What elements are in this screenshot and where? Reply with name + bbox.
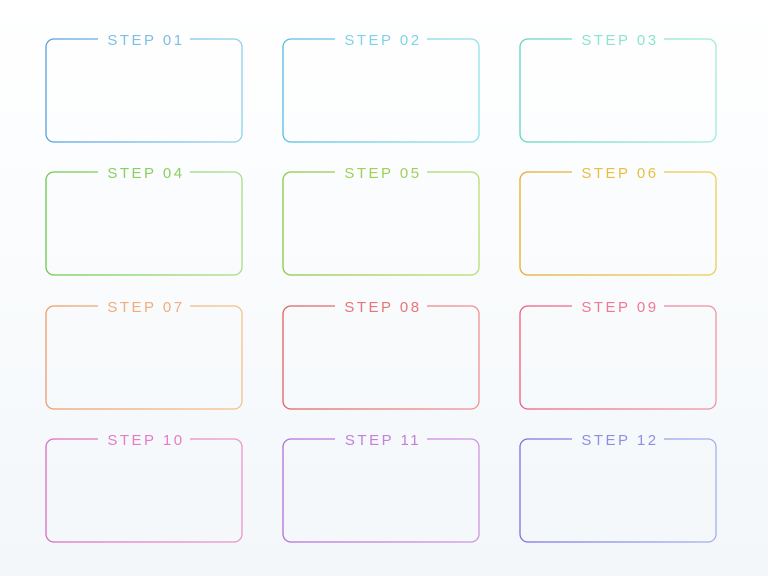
panel: step 10 bbox=[46, 432, 242, 542]
panel: step 02: STEP 02 bbox=[344, 32, 422, 49]
panel: step 12: STEP 12 bbox=[581, 432, 659, 449]
panel: step 02 bbox=[283, 32, 479, 142]
panel: step 09: STEP 09 bbox=[581, 299, 659, 316]
panel: step 07 bbox=[46, 299, 242, 409]
panel: step 04: STEP 04 bbox=[107, 165, 185, 182]
panel: step 01 bbox=[46, 32, 242, 142]
panel: step 08 bbox=[283, 299, 479, 409]
panel: step 12 bbox=[520, 432, 716, 542]
panel: step 05: STEP 05 bbox=[344, 165, 422, 182]
panel: step 03 bbox=[520, 32, 716, 142]
panel: step 07: STEP 07 bbox=[107, 299, 185, 316]
panel: step 01: STEP 01 bbox=[107, 32, 185, 49]
panel: step 08: STEP 08 bbox=[344, 299, 422, 316]
panel: step 03: STEP 03 bbox=[581, 32, 659, 49]
panel: step 09 bbox=[520, 299, 716, 409]
panel: step 11: STEP 11 bbox=[345, 432, 421, 449]
panel: step 11 bbox=[283, 432, 479, 542]
panel: step 05 bbox=[283, 165, 479, 275]
panel: step 06 bbox=[520, 165, 716, 275]
panel: step 06: STEP 06 bbox=[581, 165, 659, 182]
panel: step 04 bbox=[46, 165, 242, 275]
panel: step 10: STEP 10 bbox=[107, 432, 185, 449]
